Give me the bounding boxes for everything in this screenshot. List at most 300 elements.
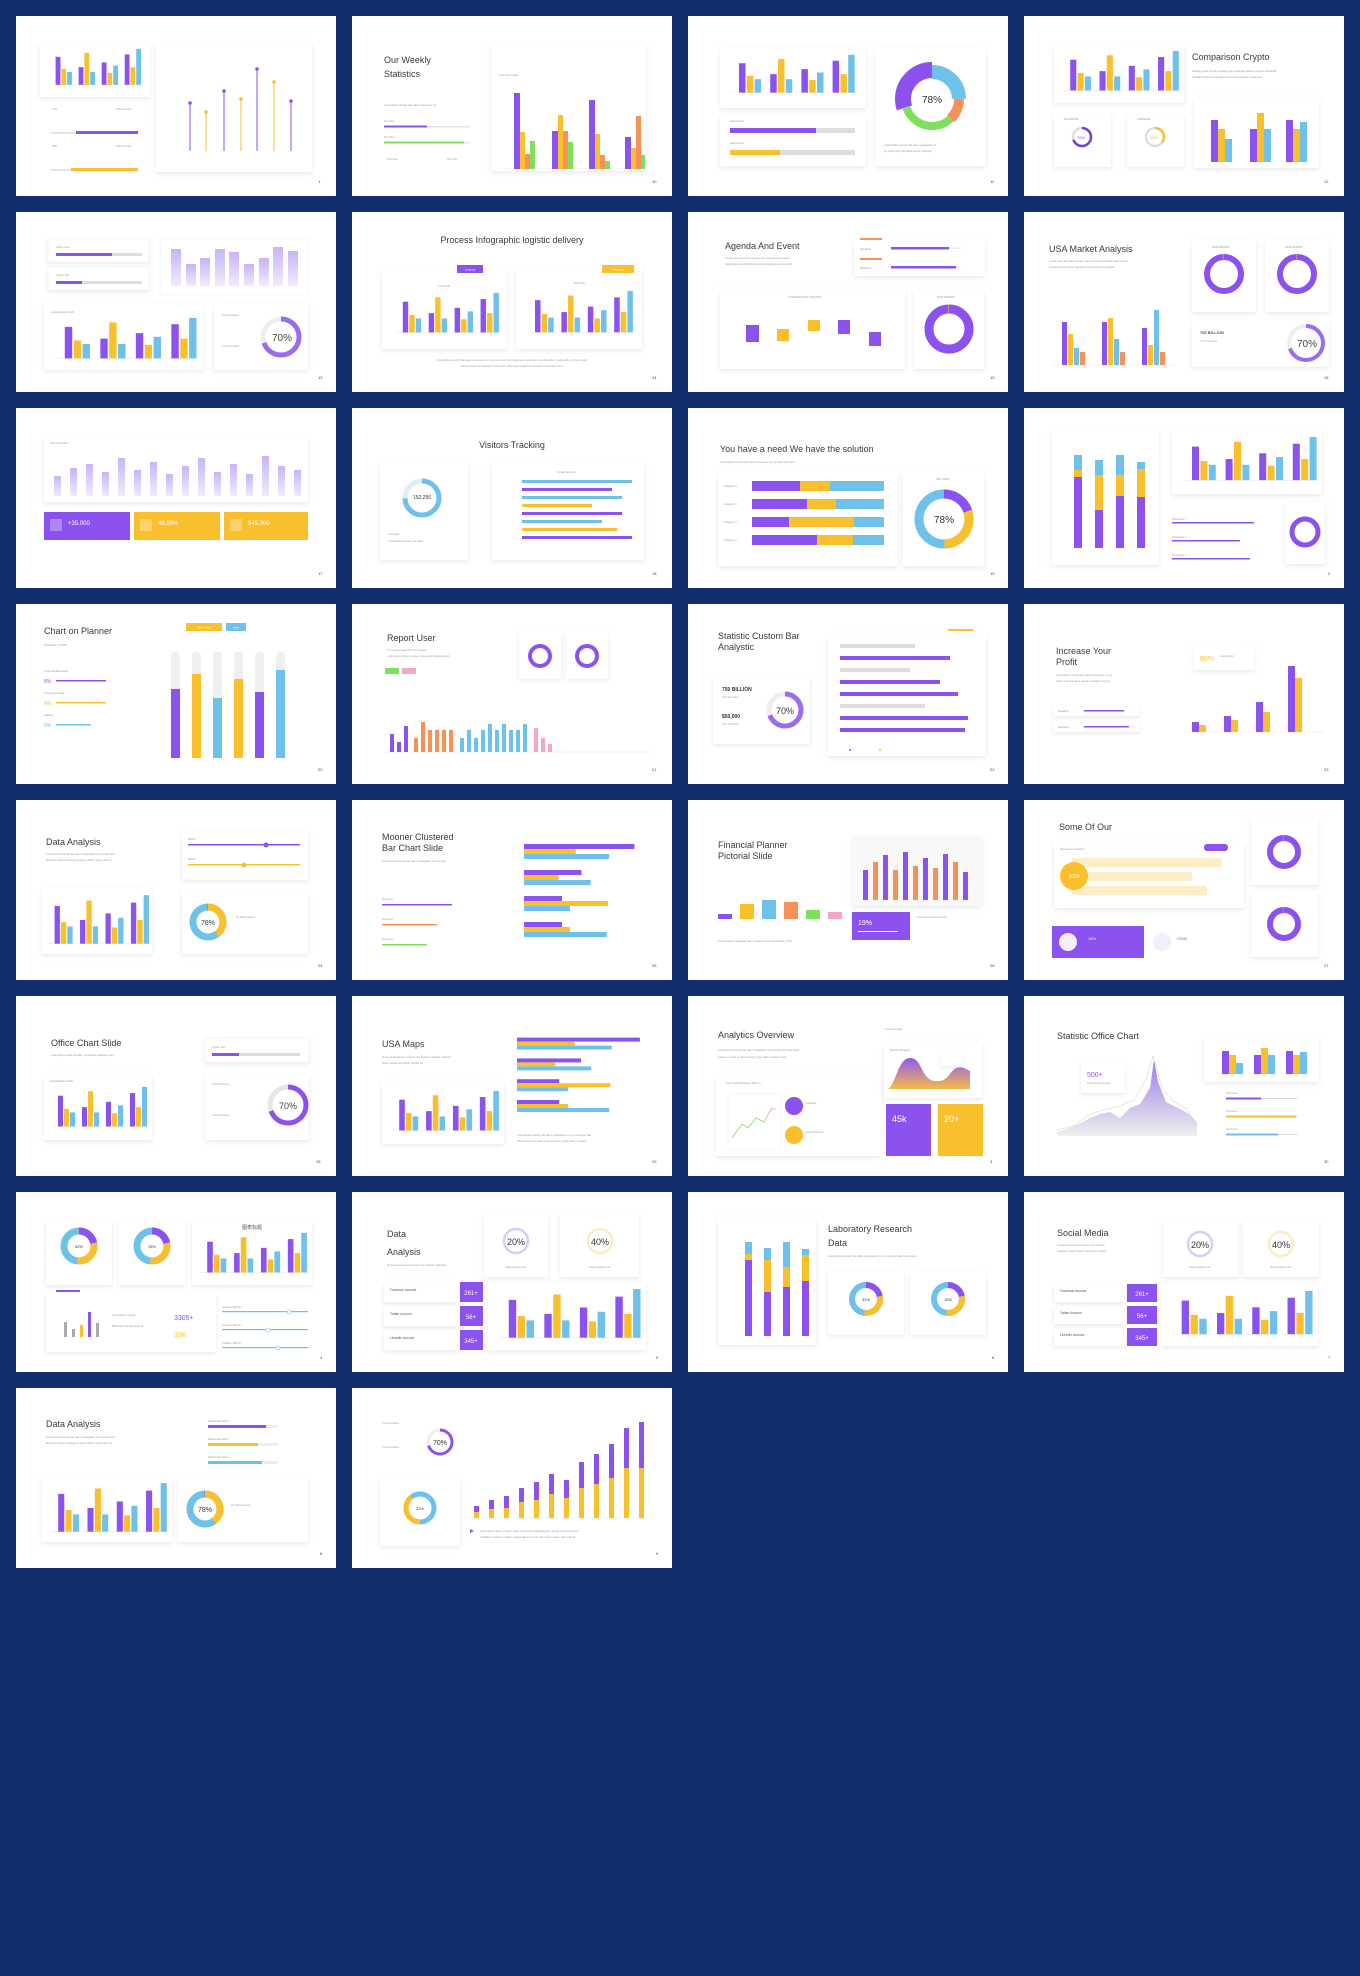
title [1057,1228,1109,1253]
bar chart card [720,48,866,108]
slide 28 [16,996,336,1176]
progress: 70% [51,107,138,134]
parameter bars [1172,517,1254,560]
title [382,1039,451,1065]
parameter bars: Parameter 3 [1172,553,1187,557]
card: january chart: January [465,268,476,272]
purple stat box: 19% [858,920,872,927]
lead block [1153,933,1188,951]
donut card [914,289,984,369]
slide 24 [16,800,336,980]
hbar chart: these sweet mornings of spring which I enjoy with my whole. [517,1139,587,1143]
slider card: Mobile [188,837,196,841]
title and list [44,626,112,729]
buttons [186,623,246,631]
accent [948,629,973,631]
skill bars: Marketing [1058,725,1070,729]
left donut card 32% [380,1478,460,1546]
purple stat box: Lorem ipsum dolor sit amet [916,915,948,919]
title: Data Analysis [46,1419,101,1429]
gradient bar chart card: Add Chart 2021 [50,441,69,445]
donut cards: Data Analysis One [1270,1265,1292,1269]
buttons: Here [233,626,240,630]
slide 15: 15 [990,375,995,380]
title: Standard & Poor's managed the bonding quantity investment. [1192,75,1263,79]
bars: text one/two: A wonderful serenity has taken possession of [384,103,436,107]
title: Lorem ipsum dolor sit amet, consectetur adipiscing elit [387,654,450,658]
donut card: backbone: BACKBONE [1064,117,1079,121]
title [718,631,800,652]
slide 13 [16,212,336,392]
slide 12 [1024,16,1344,196]
hbar card [828,634,986,756]
slide 3 [688,996,1008,1176]
gradient bars card: 2020 [1068,874,1080,880]
horizontal bar card: Virtual Payment [557,470,576,474]
slide 8: 8 [320,1551,323,1556]
slide 22: 22 [990,767,995,772]
title: Vivamus elementum semper nisi. Aenean [1057,1243,1105,1247]
title: Current Activity [885,1027,903,1031]
title: Financial Planner [718,840,788,850]
account list: 261+ [1135,1292,1149,1298]
donut card [1285,502,1325,564]
bar chart card [488,1282,646,1350]
title: A wonderful serenity has taken possession of my entire [382,859,446,863]
visitors donut card: Coverage [388,532,400,536]
slide 8 [16,1388,336,1568]
buttons: Write Here [197,626,211,630]
slide 14 [352,212,672,392]
donut card 78% [182,890,308,954]
progress lines [1226,1091,1298,1136]
footer text [470,1529,578,1539]
title: tellus. Aenean leo ligula, porttitor eu. [382,1061,424,1065]
card: january chart: Chart Title [438,284,450,288]
chart card with chinese title [192,1220,312,1285]
bars: text one/two [384,103,470,161]
stats card: Your Text Here [722,722,740,726]
footer text: Lorem ipsum dolor sit amet, pretty consectetur adipiscing elit, sed do eiusmod tempor [480,1529,578,1533]
left donut 70%: Your Text Here [382,1445,400,1449]
slide 7: 7 [1328,1355,1331,1360]
stacked hbar card: Category 2 [724,520,737,524]
bottom left card: 3305+ [174,1315,194,1322]
progress lines: Text Here [382,917,394,921]
donut card: DATA REPORT [937,295,955,299]
title [1192,52,1277,79]
bar chart card [42,1476,172,1542]
title: Increase Your [1056,646,1111,656]
bottom left card: Behaviour are improving at [112,1324,143,1328]
title: Ut wisi enim ad minim veniam, quis nostrud exerci tation ullamcorper [1049,259,1128,263]
chart card [491,43,646,171]
title and list: 6% [44,701,52,707]
donut cards [484,1214,639,1277]
bars: text one/two: Text Two [447,157,458,161]
title: Statistics [384,69,421,79]
slide 5 [352,1192,672,1372]
donut cards: 20% [1191,1240,1209,1250]
account list: LinkedIn Account [1060,1333,1084,1337]
area chart: 500+ [1087,1072,1103,1079]
option cards [48,239,149,290]
title: Data [828,1238,847,1248]
skill card [854,238,985,276]
title: Laboratory Research [828,1224,912,1234]
account list [1054,1284,1157,1346]
title: A wonderful serenity has taken possession of my entire soul, like these sweet [828,1254,917,1258]
slide 27 [1024,800,1344,980]
title and list: Chart on Planner [44,626,112,636]
bottom left card: Our statistic original [112,1313,135,1317]
title [718,1027,903,1059]
slide 10 [352,16,672,196]
donut cards: 40% [591,1237,609,1247]
slide 20 [16,604,336,784]
title: You have a need We have the solution [720,444,874,454]
slide 26: 26 [990,963,995,968]
bar card [1204,1036,1319,1082]
donut cards: 20% [507,1237,525,1247]
left donut 70%: Your Text Here [382,1421,400,1425]
donut card 78%: 78% [201,920,215,927]
account list: 345+ [1135,1336,1149,1342]
slide 16 [1024,212,1344,392]
title [46,1419,115,1445]
progress: 80%: Title text here [116,144,132,148]
title: A wonderful serenity has taken possession of my entire soul, like [720,460,795,464]
donut card 78%: my entire soul, like these sweet mornings. [884,149,932,153]
option cards: Option One [56,245,70,249]
donut card 78%: A wonderful serenity has taken possession of [884,143,936,147]
stacked hbar card: Category 3 [724,502,737,506]
title and list: 8% [44,679,52,685]
progress lines: Text Here [1226,1091,1238,1095]
title: Social Media [1057,1228,1109,1238]
donut card 78%: 78% [922,95,942,106]
account list: Twitter Account [1060,1311,1082,1315]
stacked hbar card [718,471,898,566]
left donut card 32%: 32% [416,1506,424,1511]
title: sweet mornings of spring which I enjoy with my whole heart. [718,1055,787,1059]
slide 4 [16,1192,336,1372]
option card [205,1038,309,1062]
bars: text one/two: Text One [387,157,398,161]
learn card [716,1074,881,1156]
account list: Facebook Account [1060,1289,1086,1293]
donut card 70% [214,304,308,370]
title: Some Of Our [1059,822,1112,832]
slide 26 [688,800,1008,980]
donut card 78%: 78% [934,515,954,526]
sliders [222,1305,308,1350]
slide 9 [352,1388,672,1568]
title: Pictorial Slide [718,851,773,861]
learn card: Learn With Effectively With Us [726,1081,762,1085]
detail lines [208,1419,278,1464]
donut cards: Data Analysis One [589,1265,611,1269]
footer text [437,358,588,368]
title [385,633,450,674]
annual report card [44,304,203,370]
slide 18: 18 [652,571,657,576]
lead block: +2000 [1176,936,1188,941]
slide 13: 13 [318,375,323,380]
parameter bars: Parameter 1 [1172,517,1187,521]
slide 30 [1024,996,1344,1176]
billion card: 750 BILLION [1200,330,1224,335]
progress: 70%: 70% [52,107,58,111]
title: Report User [387,633,436,643]
wave card [884,1042,982,1098]
donut card 78%: 01. Best Feature [236,915,256,919]
account list: 56+ [1137,1314,1148,1320]
progress lines [382,897,452,946]
donut card 70%: Your Text Here [212,1082,230,1086]
account list [384,1282,483,1350]
donut card 78%: 01. Best Feature [231,1503,251,1507]
donut card 70%: Your Text Here [222,313,240,317]
title [46,837,115,862]
candlestick card: COMPARE DATA STATISTIC [788,295,822,299]
progress lines: Text Here [1226,1109,1238,1113]
card: february chart: Chart Title [573,281,585,285]
donut cards: DATA REPORT [1285,245,1303,249]
donut card 70%: Your Text Here [212,1113,230,1117]
billion card: Your Text Here [1200,339,1218,343]
stat boxes: 45k [892,1114,907,1124]
donut cards [1163,1220,1319,1277]
title: Process Infographic logistic delivery [440,235,584,245]
title: Statistic Custom Bar [718,631,800,641]
title [720,444,874,464]
chart card with chinese title: 图表标题 [242,1224,262,1231]
account list: 261+ [464,1291,478,1297]
stats card: $50,000 [722,714,740,720]
donut cards [1192,240,1329,312]
bars: text one/two: Text One [384,119,395,123]
gradient bars card: Management System [1060,847,1085,851]
detail lines: Detail Information [208,1455,229,1459]
stacked bar card [1052,430,1159,565]
donut card: audience: AUDIENCE [1137,117,1151,121]
title: A wonderful serenity has taken possession of my [1056,673,1113,677]
slide 12: 12 [1324,179,1329,184]
visitors donut card [380,463,468,560]
slide 28: 28 [316,1159,321,1164]
stats card: 750 BILLION [722,687,752,693]
stat boxes: 48.99% [158,521,179,527]
slide 6: 6 [992,1355,995,1360]
slide 21 [352,604,672,784]
billion card [1192,319,1329,367]
slide 30: 30 [1324,1159,1329,1164]
stacked hbar card: Category 4 [724,484,737,488]
progress: 80% [51,144,138,171]
bar chart card [44,1074,152,1140]
option card: Option Two [212,1045,226,1049]
progress: 70%: Title text here [116,107,132,111]
stacked column chart [467,1422,650,1518]
skill card: Speaking [860,247,871,251]
progress: 80%: 80% [52,144,58,148]
donut card: audience [1127,113,1184,167]
title: suscipit lobortis nisl ut aliquip ex ea commodo consequat. [1049,265,1115,269]
slide 24: 24 [318,963,323,968]
title: Agenda And Event [725,241,800,251]
donut card 70%: 70% [272,333,292,344]
slide 5: 5 [656,1355,659,1360]
title: Data Analysis [46,837,101,847]
donut cards: DATA REPORT [1212,245,1230,249]
slide 17 [16,408,336,588]
slide 10: 10 [652,179,657,184]
title: Analysis [387,1247,421,1257]
card: lollipop chart [156,42,312,172]
footer text: incididunt ut labore et dolore magna aliqua. Ut enim ad minim veniam, quis nostrud [480,1535,576,1539]
title: Office Chart Slide [51,1038,121,1048]
area chart [1057,1056,1197,1136]
title and list: Sound and Stage [44,691,65,695]
slide 11 [688,16,1008,196]
callout [1194,647,1254,670]
wave card: Monthly Progress [890,1048,911,1052]
slide 18 [352,408,672,588]
bar chart card [42,888,152,954]
skill bars: Speaking [1058,709,1069,713]
stat boxes: +35.000 [68,521,91,527]
title and list: Lighting [44,713,54,717]
progress lines: Text Here [382,897,394,901]
donut card 70% [205,1074,309,1140]
purple stat box [852,912,948,940]
bar chart card [1172,430,1322,494]
slide 29: 29 [652,1159,657,1164]
title and list: Description for Slide [44,643,68,647]
title: A wonderful serenity has taken possession of my entire soul [46,1435,115,1439]
slide 22 [688,604,1008,784]
donut card: backbone: 70% [1077,135,1085,140]
title [1056,646,1113,683]
slide 27: 27 [1324,963,1329,968]
sliders: Creative Skill 10 [222,1305,241,1309]
slide 17: 17 [318,571,323,576]
title: Vivamus elementum semper nisi. Aenean vulputate [387,1263,446,1267]
slider card: Mobile [188,857,196,861]
left donut 70%: 70% [433,1440,447,1447]
title [384,55,431,79]
slide 29 [352,996,672,1176]
purple box: 16% [1088,936,1096,941]
horizontal bar card [492,463,644,560]
slide 19 [688,408,1008,588]
option cards: Option Two [56,273,70,277]
bottom left card [46,1290,216,1352]
donut cards: Data Analysis One [1189,1265,1211,1269]
slide 1 [16,16,336,196]
left donut 70% [382,1421,452,1454]
title: Analystic [718,642,755,652]
title: Mooner Clustered [382,832,454,842]
visitors donut card: 152.256 [413,495,431,501]
slide 14: 14 [652,375,657,380]
footer text: feel the charm of existence in this spot, which was created for the bliss of souls like mine. [461,364,563,368]
track bar chart [171,652,285,758]
title: Lorem ipsum dolor sit amet, consectetur adipiscing elit. [51,1053,114,1057]
callout: 80% [1200,656,1214,663]
card: february chart: February [612,268,624,272]
title: Vivamus elementum semper nisi. Aenean vulputate eleifend [382,1055,451,1059]
title: ullamcorper suscipit lobortis nisl ut aliquip ex ea commodo [725,262,792,266]
bar chart card [1054,46,1184,103]
slide 15 [688,212,1008,392]
stacked hbar card: Category 1 [724,538,737,542]
hbar chart: A wonderful serenity has taken possession of my entire soul, like [517,1133,592,1137]
slide 1: 1 [318,179,321,184]
progress lines: Text Here [1226,1127,1238,1131]
bar chart [384,722,652,752]
callout: A wonderful [1220,654,1234,658]
title: The is data panel from the hosting [387,648,427,652]
data feed card: Data Feed 2 [730,141,745,145]
account list: Twitter Account [390,1312,412,1316]
hbar chart [517,1038,640,1143]
slide 7 [1024,1192,1344,1372]
donut cards [828,1272,986,1335]
account list: 345+ [464,1339,478,1345]
donut card 70%: Your Text Here [222,344,240,348]
title: entire soul, like these sweet mornings of spring [1056,679,1110,683]
slide 2: 2 [1328,571,1331,576]
donut cards [519,631,608,679]
hbar chart [508,836,646,956]
title and list: Food and Beverages [44,669,69,673]
bars: text one/two: Text Two [384,135,395,139]
title [828,1224,917,1258]
title: Comparison Crypto [1192,52,1270,62]
title [382,832,454,863]
donut card: backbone [1054,113,1111,167]
donut card 78% [875,48,986,166]
bar chart [1052,310,1176,365]
slide 2 [1024,408,1344,588]
donut card 78% [903,471,984,566]
progress lines: Text Here [382,937,394,941]
account list: 56+ [466,1315,477,1321]
data feed card: Data Feed 1 [730,119,745,123]
slide 25 [352,800,672,980]
title [725,241,800,266]
account list: Facebook Account [390,1288,416,1292]
stat boxes: 20+ [944,1114,959,1124]
sliders: Creative Skill 10 [222,1323,241,1327]
donut card 78% [178,1476,308,1542]
donut cards: Data Analysis One [505,1265,527,1269]
slide 21: 21 [652,767,657,772]
parameter bars: Parameter 2 [1172,535,1187,539]
learn card: Students [806,1101,817,1105]
detail lines: Detail Information [208,1437,229,1441]
slide 25: 25 [652,963,657,968]
bar chart card: Annual Report 2020 [50,1079,74,1083]
stat boxes: $45,000 [248,521,270,527]
visitors donut card: A wonderful serenity has taken [388,539,424,543]
title: Profit [1056,657,1078,667]
card: small bar chart [40,43,150,97]
detail lines: Detail Information [208,1419,229,1423]
area chart: A wonderful serenity [1087,1081,1111,1085]
